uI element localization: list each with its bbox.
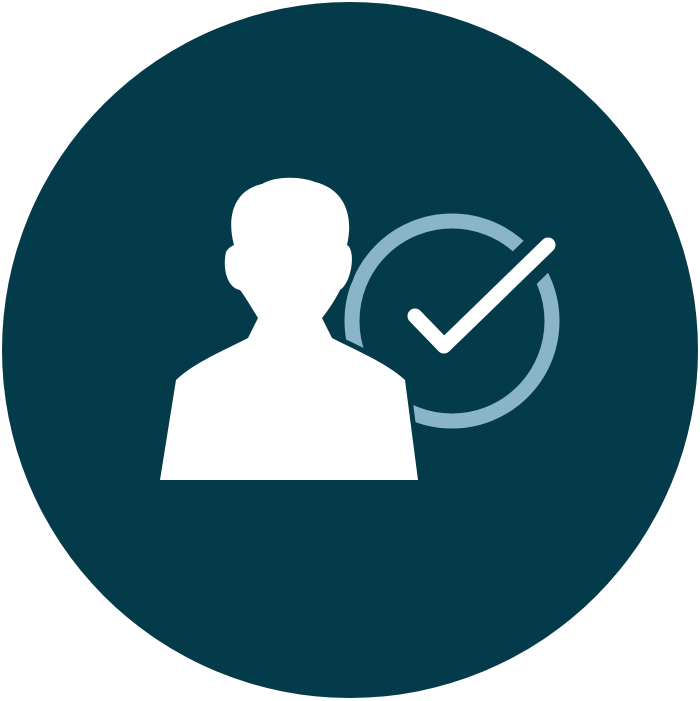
icon: person silhouette	[160, 178, 418, 480]
ring: verification circle	[352, 221, 552, 421]
icon: checkmark	[415, 245, 548, 346]
